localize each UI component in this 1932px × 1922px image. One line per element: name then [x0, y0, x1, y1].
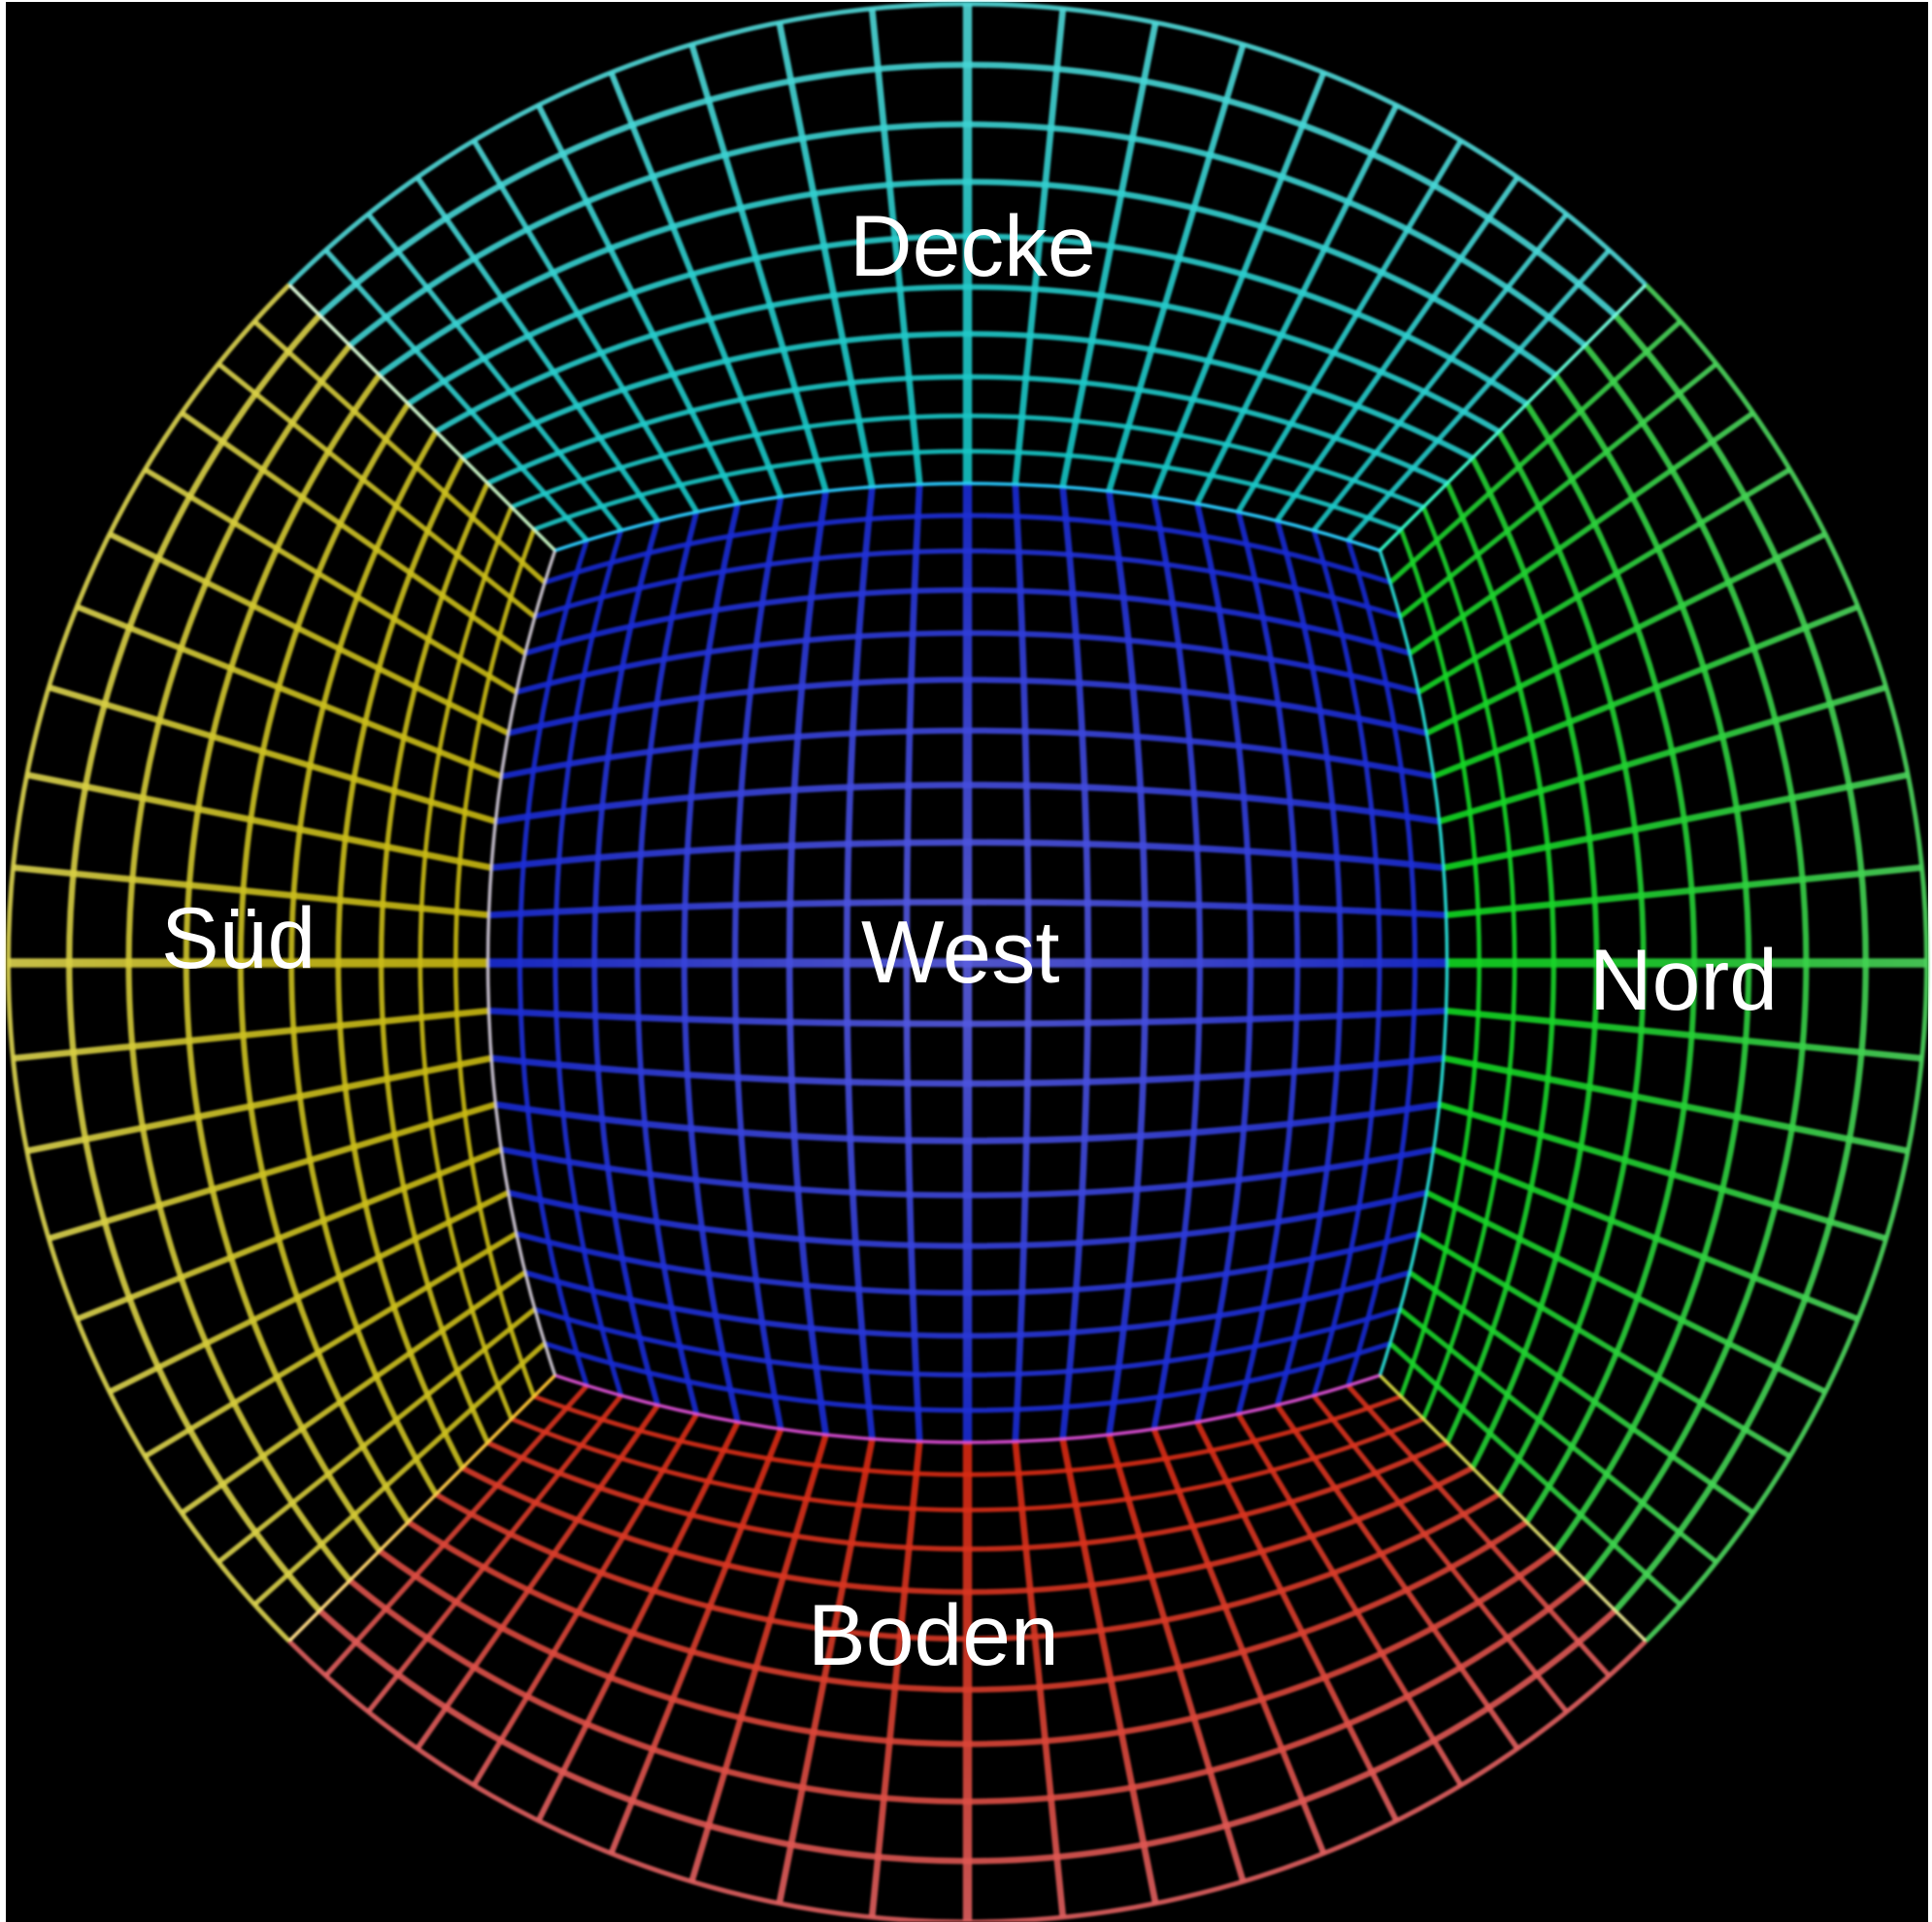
label: Süd: Süd: [161, 889, 316, 986]
label: Boden: Boden: [808, 1586, 1059, 1683]
panel: Nord face grid (green): [1380, 284, 1926, 1641]
label: West: West: [861, 904, 1060, 1002]
panel: Decke face grid (cyan): [289, 4, 1646, 550]
panel: Süd face grid (yellow): [8, 284, 555, 1641]
panel: Boden face grid (red): [289, 1375, 1646, 1922]
label: Decke: Decke: [849, 197, 1096, 294]
panel: West face grid (blue): [487, 483, 1447, 1442]
label: Nord: Nord: [1589, 931, 1778, 1028]
